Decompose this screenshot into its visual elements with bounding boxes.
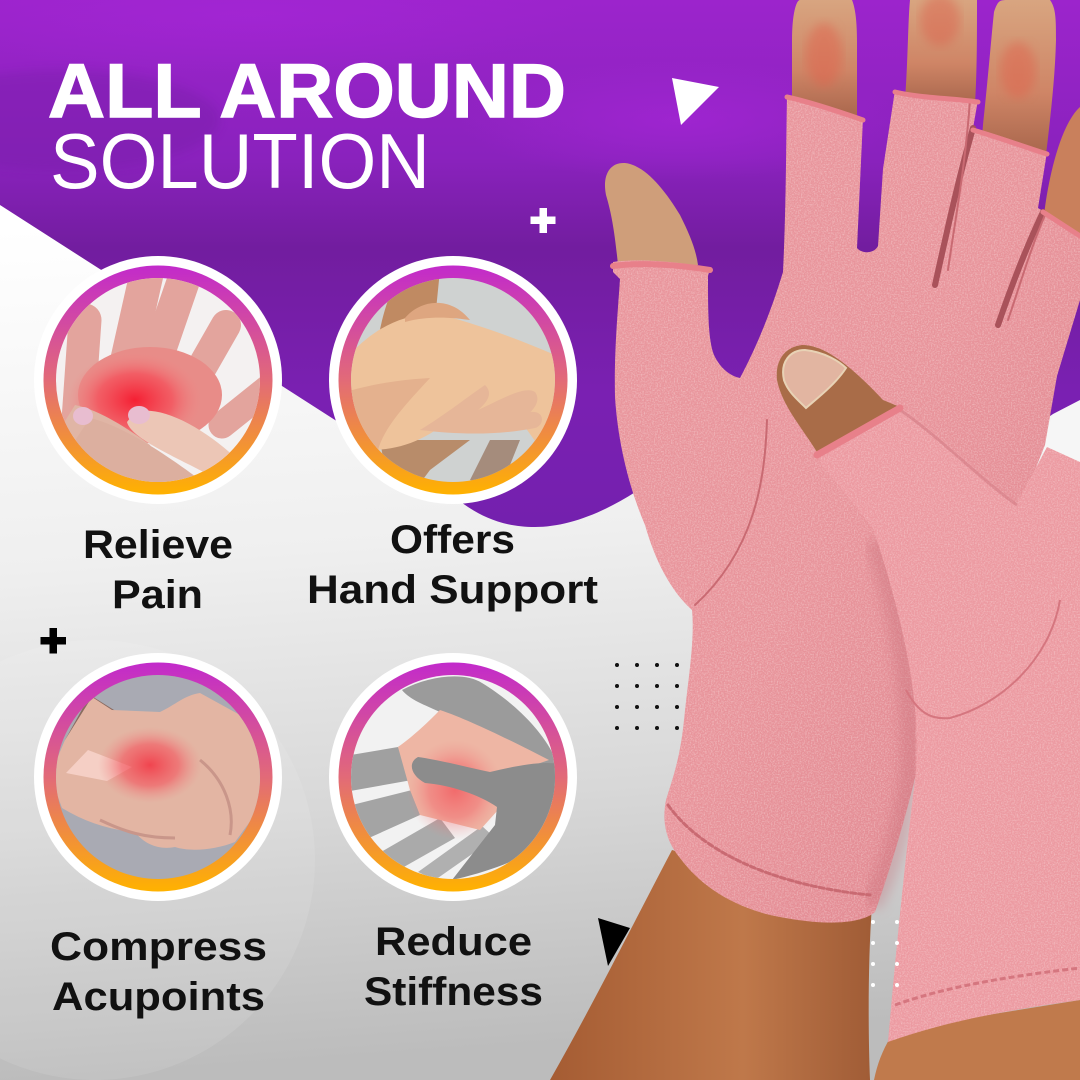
label: compress acupoints: Compress <box>50 925 267 969</box>
dot grid: white <box>871 920 899 987</box>
icon: white triangle <box>672 78 719 125</box>
photo: grey hand with red palm <box>351 675 555 879</box>
right thumb nail <box>777 345 900 455</box>
title: ALL AROUND <box>48 49 566 134</box>
dot grid: black <box>615 663 699 730</box>
panel: relieve pain <box>34 256 282 504</box>
photo: supporting hand <box>351 278 555 482</box>
glove shading <box>870 540 911 905</box>
label: reduce stiffness <box>364 920 543 1014</box>
label: relieve pain: Pain <box>112 573 203 617</box>
photo: painful hand <box>56 278 260 482</box>
right hand edge shadow <box>900 410 1017 505</box>
label: offers hand support <box>307 518 598 612</box>
panel: reduce stiffness <box>329 653 577 901</box>
panel: hand support <box>329 256 577 504</box>
title <box>48 49 566 205</box>
label: offers hand support: Hand Support <box>307 568 598 612</box>
label: relieve pain <box>83 523 233 617</box>
label: compress acupoints: Acupoints <box>52 975 265 1019</box>
label: compress acupoints <box>50 925 267 1019</box>
label: reduce stiffness: Stiffness <box>364 970 543 1014</box>
product photo: gloved hands <box>550 0 1080 1080</box>
left hand glove <box>613 90 1080 923</box>
left forearm <box>550 850 872 1080</box>
label: offers hand support: Offers <box>390 518 515 562</box>
bare fingertips <box>605 0 1080 265</box>
right forearm <box>874 1000 1080 1080</box>
right hand glove <box>817 407 1080 1042</box>
icon: black triangle <box>598 918 630 966</box>
label: relieve pain: Relieve <box>83 523 233 567</box>
icon: black plus <box>40 628 66 654</box>
right palm seam <box>906 600 1060 718</box>
title: SOLUTION <box>50 117 430 205</box>
icon: white plus <box>530 208 556 233</box>
purple header shape <box>0 0 1080 527</box>
right cuff stitching <box>895 968 1080 1005</box>
photo: pressed palm <box>56 675 260 879</box>
glove finger gaps <box>613 92 1080 895</box>
label: reduce stiffness: Reduce <box>375 920 532 964</box>
panel: compress acupoints <box>34 653 282 901</box>
